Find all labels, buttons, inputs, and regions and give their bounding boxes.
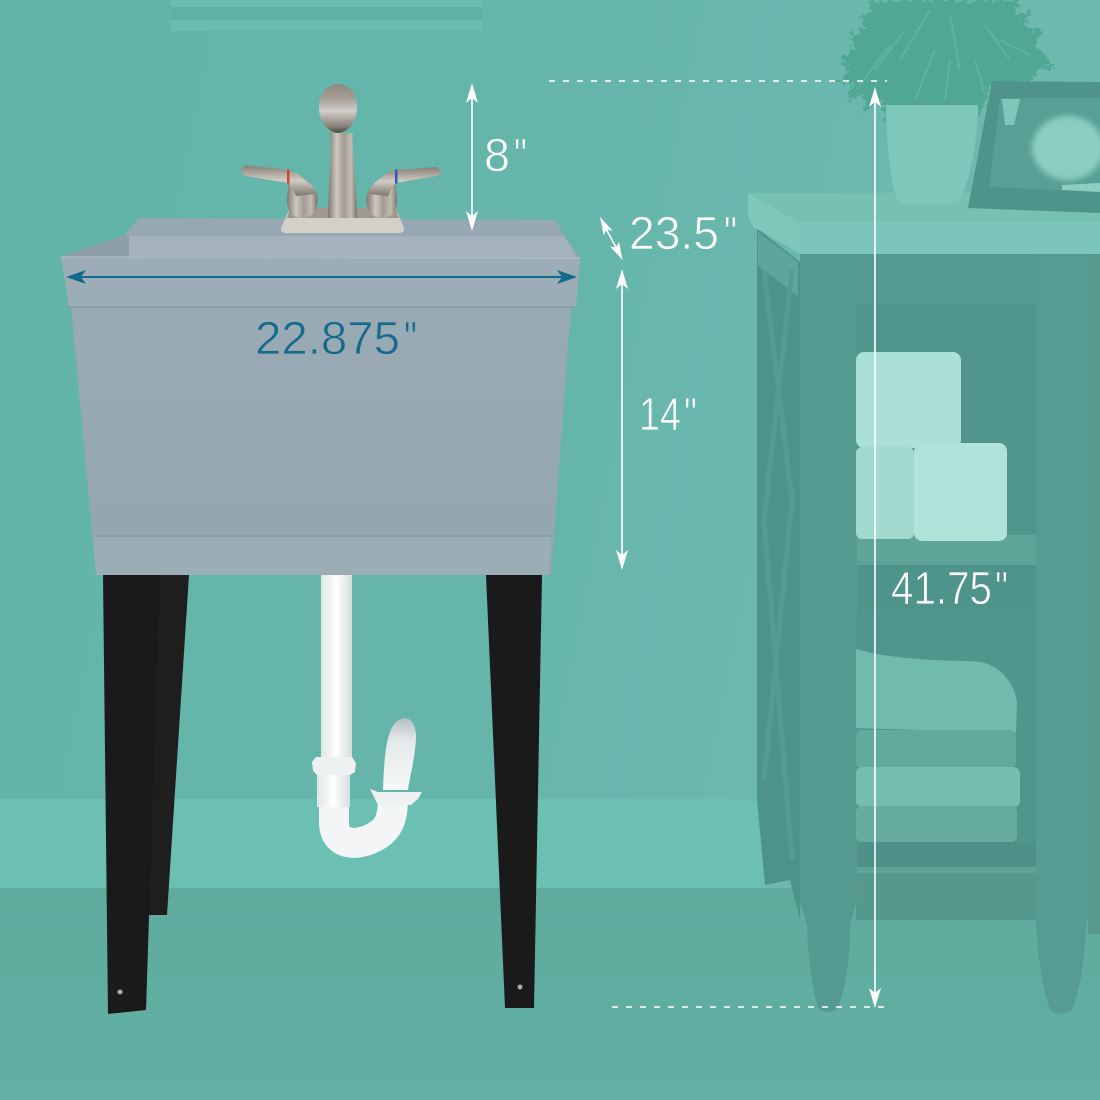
- collar: [317, 773, 350, 807]
- label: 23.5 inches: ": [724, 207, 737, 259]
- towels: [856, 649, 1020, 842]
- label: 41.75 inches: ": [995, 562, 1008, 614]
- trap outlet: [383, 718, 416, 790]
- faucet: [240, 84, 443, 233]
- front right leg: [486, 575, 542, 1008]
- wall picture frame fragment: [171, 0, 482, 31]
- label: 23.5 inches: 23.5: [629, 207, 719, 259]
- left handle: [240, 165, 318, 218]
- upper slip nut: [312, 757, 356, 775]
- label: 41.75 inches: 41.75: [891, 562, 992, 614]
- label: 8 inches: ": [514, 129, 527, 181]
- front rim: [61, 257, 580, 307]
- label: 8 inches: 8: [484, 129, 510, 181]
- spout: [328, 133, 357, 218]
- back ledge: [61, 218, 580, 258]
- photo frame: [968, 81, 1100, 213]
- label: 22.875 inches: ": [404, 312, 417, 364]
- plant: [835, 0, 1058, 128]
- arrow: 22.875 inch width: [66, 270, 577, 284]
- dashed guide lines: [549, 81, 890, 1007]
- cabinet: [748, 192, 1100, 1014]
- right handle: [366, 167, 443, 218]
- back leg: [143, 575, 189, 915]
- basin interior: [129, 236, 576, 257]
- counter top: [748, 192, 1100, 254]
- tail pipe: [321, 574, 352, 760]
- arrow: 14 inch depth: [616, 269, 628, 570]
- label: 14 inches: 14: [639, 388, 681, 440]
- label: 14 inches: ": [684, 388, 697, 440]
- toilet paper rolls: [856, 352, 1007, 541]
- trap bend: [334, 798, 393, 843]
- arrow: 41.75 inch total height: [869, 87, 881, 1008]
- lower shelf: [856, 842, 1036, 920]
- sink tub: [61, 218, 580, 575]
- cabinet side panel: [757, 228, 800, 920]
- front left leg: [103, 575, 160, 1014]
- right cabinet post and neighbour: [1088, 254, 1100, 934]
- deck plate: [281, 208, 404, 233]
- arrow: 8 inch height: [466, 83, 478, 231]
- arrow: 23.5 inch depth: [600, 217, 623, 260]
- floor: [0, 888, 1100, 1100]
- middle shelf: [856, 535, 1036, 611]
- label: 22.875 inches: 22.875: [255, 312, 400, 364]
- spout head: [319, 84, 357, 133]
- front right post: [1036, 254, 1088, 1014]
- lower slip nut: [370, 789, 422, 805]
- plant pot: [886, 105, 978, 204]
- cabinet interior: [850, 250, 1040, 875]
- baseboard: [0, 799, 768, 889]
- drain pipe: [312, 574, 422, 843]
- front left post: [800, 254, 857, 1012]
